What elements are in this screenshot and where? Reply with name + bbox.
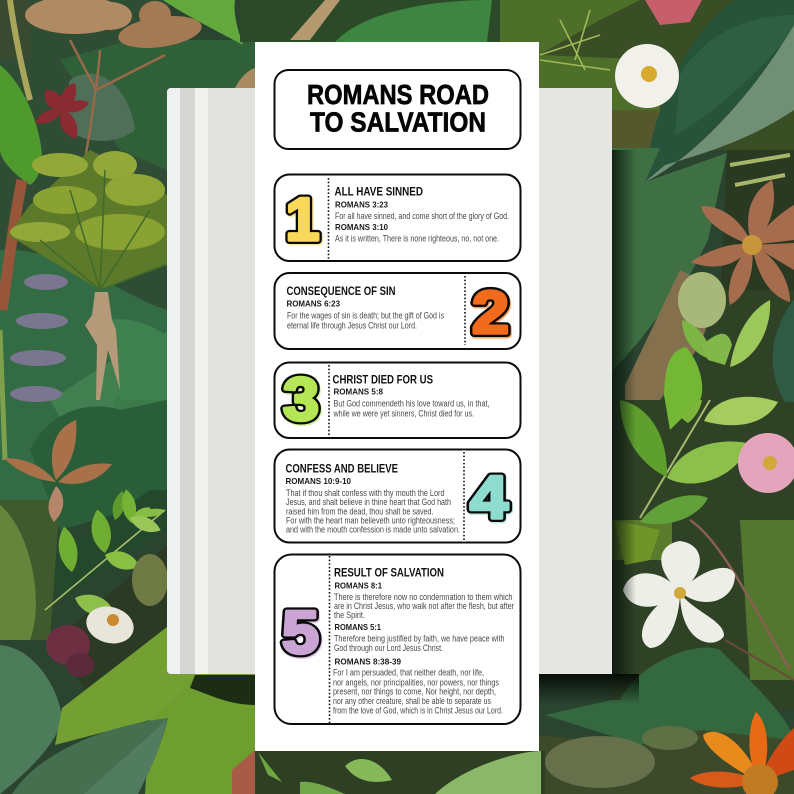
icon: white daisy xyxy=(615,44,679,108)
icon: tan dried flowers xyxy=(25,0,204,190)
background: bottom center leaves xyxy=(232,750,545,794)
step 3: christ died for us: ROMANS 5:8 xyxy=(334,387,383,397)
background: top-right large leaves xyxy=(645,0,794,182)
background: left dark leaves xyxy=(0,180,167,600)
icon: twine tie xyxy=(85,292,120,400)
title box: ROMANS ROAD xyxy=(307,79,489,110)
step 4: confess and believe: and with the mouth confession is made unto salvation. xyxy=(286,525,460,535)
step 1: all have sinned: ROMANS 3:10 xyxy=(335,222,388,232)
step 4: confess and believe: 4 xyxy=(470,464,509,531)
canvas drop shadow xyxy=(539,150,639,704)
step 4: confess and believe: ROMANS 10:9-10 xyxy=(286,476,351,486)
step 2: consequence of sin: 2 xyxy=(473,280,510,348)
icon: yellow-green herb bouquet xyxy=(8,150,167,290)
step 5: result of salvation xyxy=(274,554,520,724)
icon: brown leaves xyxy=(4,420,112,522)
step 5: result of salvation: For I am persuaded, that neither death, nor life, xyxy=(333,668,484,678)
step 5: result of salvation: 5 xyxy=(282,599,319,666)
icon: pink flower xyxy=(690,433,794,680)
background: right lower base xyxy=(539,400,794,794)
step 1: all have sinned xyxy=(274,174,520,261)
step 1: all have sinned: ROMANS 3:23 xyxy=(335,199,388,209)
step 2: consequence of sin: CONSEQUENCE OF SIN xyxy=(286,285,396,298)
step 2: consequence of sin: 2 xyxy=(472,279,509,346)
step 2: consequence of sin: 2 xyxy=(472,279,509,346)
step 3: christ died for us: while we were yet sinners, Christ died for us. xyxy=(333,409,474,419)
background: top-right ferns xyxy=(500,0,794,150)
step 2: consequence of sin: ROMANS 6:23 xyxy=(286,299,340,309)
icon: right green leaves xyxy=(614,300,794,565)
background: bottom-left leaves xyxy=(0,500,260,794)
icon: red flower xyxy=(32,80,91,142)
step 2: consequence of sin xyxy=(274,273,520,349)
step 5: result of salvation: God through our Lord Jesus Christ. xyxy=(334,643,443,653)
icon: brown flower xyxy=(691,180,794,305)
step 5: result of salvation: RESULT OF SALVATION xyxy=(334,567,444,580)
step 1: all have sinned: As it is written, There is none righteous, no, not one. xyxy=(335,233,499,243)
step 5: result of salvation: Therefore being justified by faith, we have peace with xyxy=(334,634,505,644)
step 5: result of salvation: present, nor things to come, Nor height, nor depth, xyxy=(333,687,496,697)
icon: large white flower xyxy=(623,541,735,648)
step 3: christ died for us: CHRIST DIED FOR US xyxy=(332,373,433,386)
step 5: result of salvation: from the love of God, which is in Christ Jesus our Lord. xyxy=(333,705,503,715)
step 5: result of salvation: 5 xyxy=(283,600,320,668)
step 4: confess and believe: 4 xyxy=(470,464,509,531)
step 5: result of salvation: ROMANS 8:1 xyxy=(334,580,382,590)
step 3: christ died for us: 3 xyxy=(283,366,319,433)
icon: green sprig leaves xyxy=(45,488,166,621)
step 3: christ died for us: 3 xyxy=(283,366,319,433)
step 5: result of salvation: are in Christ Jesus, who walk not after the flesh, but after xyxy=(334,601,514,611)
background: top-left foliage xyxy=(0,0,255,330)
icon: daisy and maroon flowers xyxy=(46,554,168,677)
title box: TO SALVATION xyxy=(310,106,486,138)
step 5: result of salvation: ROMANS 5:1 xyxy=(334,622,381,632)
step 2: consequence of sin: For the wages of sin is death; but the gift of God is xyxy=(287,310,444,320)
step 1: all have sinned: 1 xyxy=(286,186,320,253)
step 3: christ died for us: But God commendeth his love toward us, in that, xyxy=(334,399,490,409)
step 5: result of salvation: 5 xyxy=(282,599,319,666)
step 3: christ died for us: 3 xyxy=(284,368,320,434)
step 1: all have sinned: ALL HAVE SINNED xyxy=(334,185,423,198)
background: top center foliage xyxy=(235,0,550,88)
step 4: confess and believe xyxy=(274,450,520,542)
step 2: consequence of sin: eternal life through Jesus Christ our Lord. xyxy=(287,320,417,330)
white bookmark panel xyxy=(255,42,539,751)
step 3: christ died for us xyxy=(274,362,520,438)
step 5: result of salvation: ROMANS 8:38-39 xyxy=(334,656,401,666)
step 5: result of salvation: the Spirit. xyxy=(334,610,365,620)
icon: purple flower sprigs xyxy=(10,274,68,402)
step 1: all have sinned: For all have sinned, and come short of the glory of God. xyxy=(335,211,509,221)
step 4: confess and believe: Jesus, and shalt believe in thine heart that God hath xyxy=(286,497,451,507)
step 4: confess and believe: 4 xyxy=(471,466,510,532)
step 1: all have sinned: 1 xyxy=(287,188,321,254)
icon: orange flower xyxy=(690,712,794,794)
step 4: confess and believe: That if thou shalt confess with thy mouth the Lord xyxy=(286,488,445,498)
step 5: result of salvation: nor angels, nor principalities, nor powers, nor things xyxy=(333,677,499,687)
step 4: confess and believe: For with the heart man believeth unto righteousness; xyxy=(286,516,455,526)
background: right middle leaf xyxy=(612,148,794,400)
title box xyxy=(274,70,520,149)
step 5: result of salvation: nor any other creature, shall be able to separate us xyxy=(333,696,491,706)
step 1: all have sinned: 1 xyxy=(286,186,320,253)
white canvas book xyxy=(167,88,612,674)
step 5: result of salvation: There is therefore now no condemnation to them which xyxy=(334,592,513,602)
step 4: confess and believe: raised him from the dead, thou shalt be saved. xyxy=(286,506,434,516)
step 4: confess and believe: CONFESS AND BELIEVE xyxy=(286,462,398,475)
